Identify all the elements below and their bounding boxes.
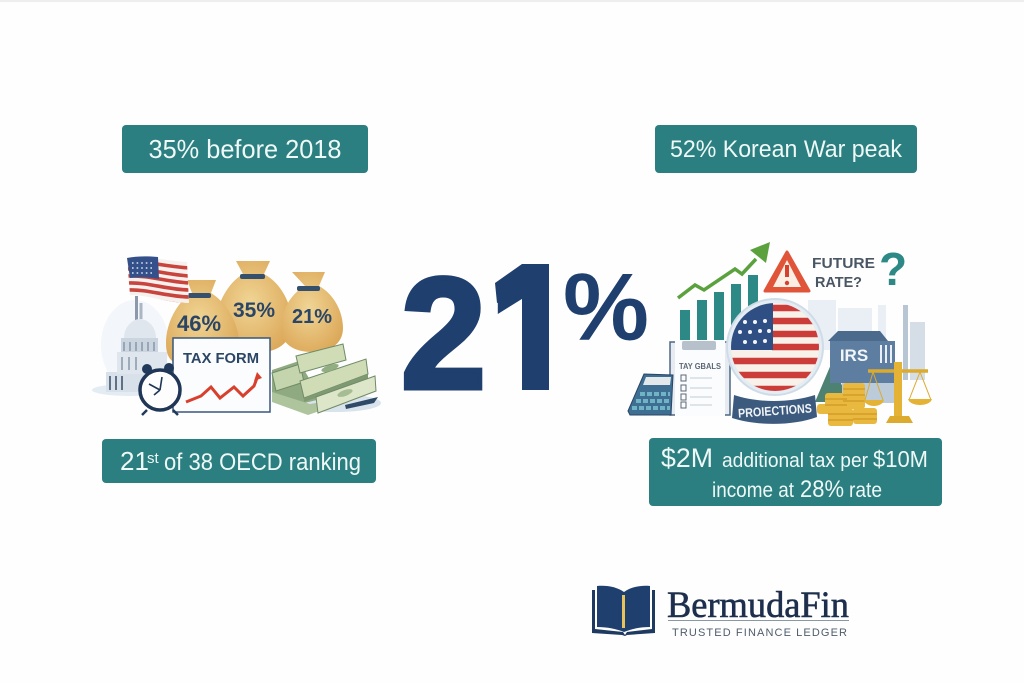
callout: $2M additional tax: 28% (800, 476, 844, 503)
icon: stacks of cash (272, 344, 381, 415)
icon: IRS building (828, 331, 902, 403)
icon: money bag 21%: 21% (292, 306, 332, 328)
callout: 35% before 2018: 35% before 2018 (148, 134, 342, 164)
icon: gold coins (817, 383, 877, 426)
callout: $2M additional tax: additional tax per (722, 450, 868, 472)
callout: $2M additional tax: $10M (873, 446, 928, 472)
icon: open book (592, 586, 655, 636)
icon: money bag 46%: 46% (177, 311, 221, 336)
text: future rate question (812, 243, 907, 295)
icon: clipboard with tax goals: TAY GBALS (679, 361, 721, 371)
icon: crystal globe with flag (727, 299, 823, 395)
icon: money bag 35% (216, 261, 292, 353)
icon: money bag 46% (166, 280, 239, 367)
icon: money bag 21% (281, 272, 343, 352)
callout: $2M additional tax (649, 438, 942, 506)
headline figure: 21% (401, 246, 649, 422)
icon: tax form: TAX FORM (183, 351, 259, 367)
headline figure: 21%: 1 (487, 246, 575, 422)
text: future rate question: ? (879, 243, 907, 295)
icon: globe base labelled projections (732, 395, 817, 424)
right illustration: future projections (628, 242, 932, 426)
callout: $2M additional tax: $2M (661, 443, 713, 473)
headline figure: 21%: 2 (401, 246, 486, 422)
left illustration: tax history (92, 256, 381, 415)
logo: BermudaFin (592, 585, 849, 639)
callout: $2M additional tax: rate (849, 479, 882, 502)
icon: calculator (628, 374, 673, 415)
arrow: green trend line (678, 242, 770, 298)
icon: American flag (127, 256, 190, 305)
logo tagline: TRUSTED FINANCE LEDGER (672, 627, 847, 639)
callout: 21st of 38 OECD ranking: of 38 OECD ranking (164, 449, 361, 476)
callout: 21st of 38 OECD ranking (102, 439, 376, 483)
icon: money bag 35%: 35% (233, 299, 275, 322)
callout: 35% before 2018 (122, 125, 368, 173)
text: future rate question: FUTURE (812, 255, 875, 272)
callout: $2M additional tax: income at (712, 479, 794, 502)
icon: tax form (173, 338, 270, 412)
callout: 52% Korean War peak (655, 125, 917, 173)
icon: Capitol building (92, 296, 169, 396)
logo wordmark: BermudaFin (667, 585, 849, 626)
icon: IRS building: IRS (840, 346, 868, 365)
text: future rate question: RATE? (815, 274, 862, 291)
headline figure: 21%: % (563, 254, 649, 361)
icon: warning triangle (765, 252, 809, 291)
icon: trees (815, 362, 849, 402)
callout: 21st of 38 OECD ranking: st (147, 450, 160, 467)
bar chart: rising teal bars (680, 275, 758, 344)
icon: globe base labelled projections: PROIECTIONS (738, 401, 812, 421)
icon: pale city skyline (808, 300, 925, 380)
callout: 52% Korean War peak: 52% Korean War peak (670, 136, 903, 163)
icon: alarm clock (140, 363, 180, 415)
icon: clipboard with tax goals (670, 340, 730, 416)
callout: 21st of 38 OECD ranking: 21 (120, 446, 149, 476)
icon: balance scale (864, 362, 932, 423)
